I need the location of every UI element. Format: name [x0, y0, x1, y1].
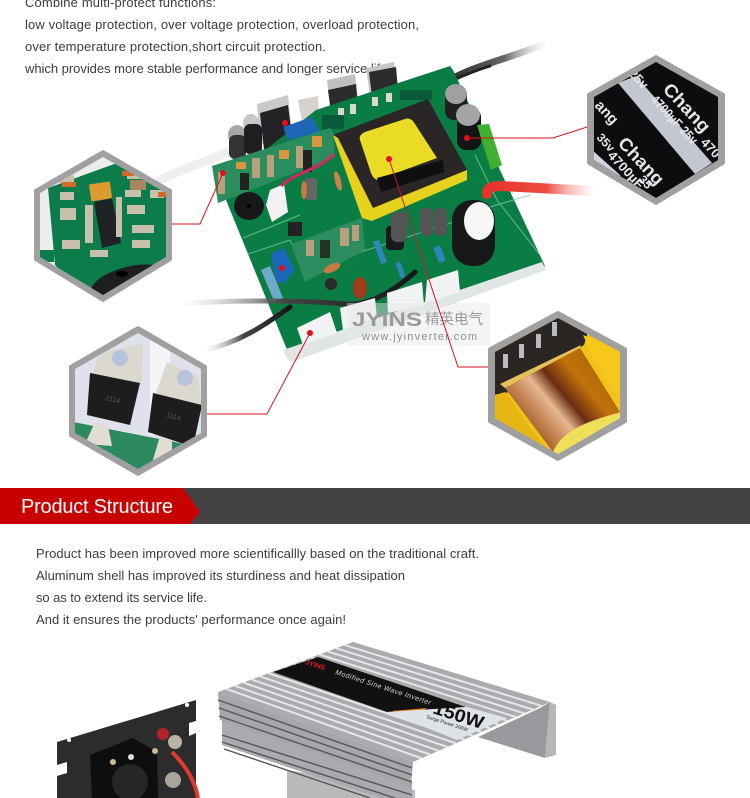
large electrolytic capacitor	[452, 200, 495, 266]
top edge components	[322, 90, 432, 129]
hexagon callout: capacitor detail: Chang	[614, 133, 668, 189]
white rating area	[387, 707, 507, 740]
text block: product structure description: Product has been improved more scientificallly based on the traditional craft.	[36, 546, 479, 561]
watermark: JYINS	[352, 310, 422, 331]
watermark: 精英电气	[425, 310, 483, 328]
wattage label: Surge Power 300W	[425, 714, 469, 733]
label text: JYINS	[304, 659, 326, 672]
hexagon callout: capacitor detail: 4700µF	[605, 148, 647, 192]
lower circuit module	[261, 208, 447, 301]
orange flash	[392, 707, 467, 715]
fan	[90, 738, 158, 798]
hexagon callout: capacitor detail: ang	[591, 97, 622, 128]
black label	[273, 657, 466, 712]
text block: product structure description: so as to extend its service life.	[36, 590, 207, 605]
watermark: www.jyinverter.com	[361, 331, 477, 343]
front fins	[218, 692, 413, 787]
watermark	[347, 303, 490, 346]
circuit board photo	[160, 43, 594, 362]
right side wall	[478, 702, 550, 758]
banner title: Product Structure	[21, 496, 173, 518]
wattage label: 150W	[431, 698, 486, 733]
PCB	[226, 66, 545, 357]
faded wires	[160, 43, 547, 180]
hexagon callout: capacitor detail	[588, 56, 724, 204]
label text: Modified Sine Wave Inverter	[334, 669, 432, 707]
black cables	[180, 272, 415, 350]
hexagon callout: transistors detail	[70, 328, 206, 475]
hexagon callout: capacitor detail: 25v	[626, 66, 652, 92]
text block: product structure description: And it ensures the products' performance once again!	[36, 612, 346, 627]
transformer	[333, 99, 467, 221]
PCB traces	[243, 155, 540, 270]
fan end plate	[57, 700, 198, 798]
control module top left	[212, 128, 335, 203]
text block: protection functions: over temperature protection,short circuit protection.	[25, 39, 326, 54]
section banner	[0, 488, 750, 524]
hexagon callout: capacitor detail: 470	[698, 135, 724, 161]
red power wire	[487, 186, 594, 194]
text block: protection functions: low voltage protection, over voltage protection, overload protection,	[25, 17, 419, 32]
fin lines	[226, 645, 541, 758]
hexagon callout: copper coil detail	[490, 312, 626, 460]
terminals and red wire	[157, 728, 198, 798]
lower body	[287, 770, 415, 798]
hexagon callout: transistors detail: 2114	[105, 395, 121, 405]
heat sink tabs	[257, 62, 398, 150]
white insulating tape blocks	[297, 270, 460, 345]
callout dots	[220, 120, 470, 336]
hexagon callout: capacitor detail: 4700µF 25v	[648, 92, 702, 148]
text block: product structure description	[36, 546, 479, 627]
text block: product structure description: Aluminum shell has improved its sturdiness and heat dissipation	[36, 568, 405, 583]
label text	[304, 659, 432, 707]
hexagon callout: capacitor detail: Chang	[659, 79, 715, 137]
capacitors top right and fuse	[445, 84, 502, 170]
buzzer and connector	[234, 154, 343, 236]
aluminum inverter housing	[218, 642, 556, 798]
text block: protection functions	[24, 0, 419, 76]
text block: protection functions: which provides more stable performance and longer service life.	[24, 61, 391, 76]
hexagon callout: transistors detail: 1114	[166, 412, 181, 422]
small capacitors and blue trimmer	[228, 114, 320, 159]
hexagon callout: capacitor detail: 35v	[594, 130, 618, 155]
top plate	[218, 642, 550, 762]
hexagon callout: circuit chip detail	[36, 152, 170, 306]
hexagon callout: capacitor detail: 35	[636, 172, 655, 192]
callout leader lines	[172, 127, 587, 414]
